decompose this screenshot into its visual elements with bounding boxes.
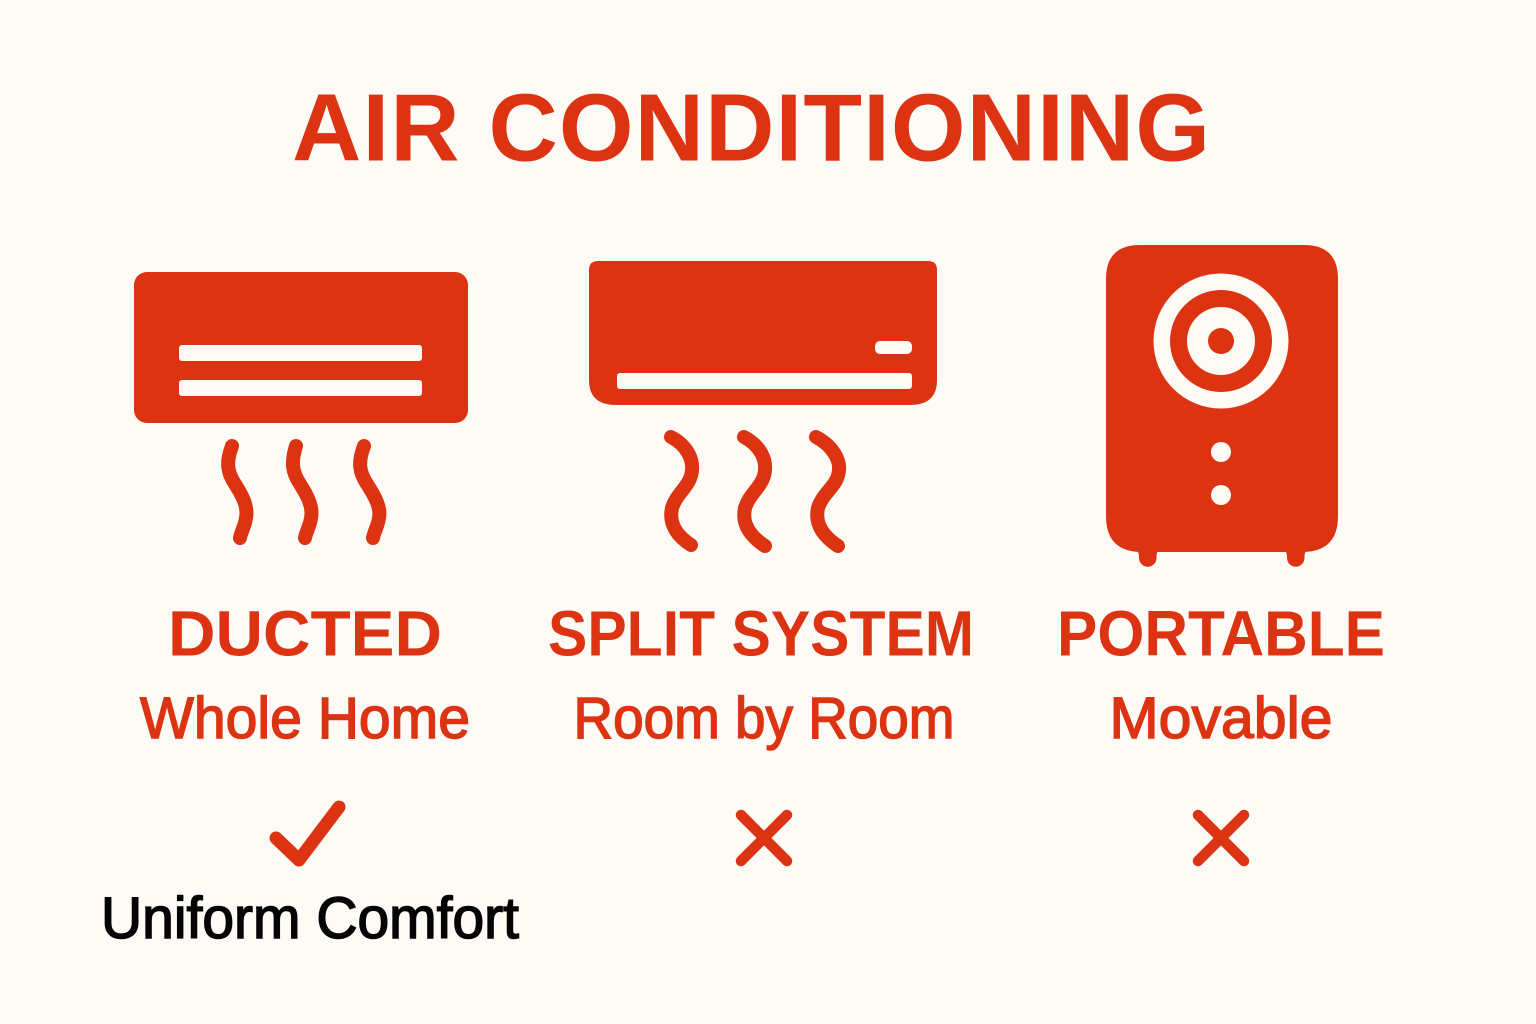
label: uniform comfort: Uniform Comfort bbox=[101, 886, 519, 951]
icon: check mark bbox=[276, 807, 339, 860]
heading: portable: PORTABLE bbox=[1057, 598, 1385, 670]
icon: cross split system bbox=[741, 815, 787, 861]
icon: portable unit bbox=[1106, 245, 1338, 567]
subheading: room by room: Room by Room bbox=[574, 686, 954, 751]
heading: split system: SPLIT SYSTEM bbox=[548, 598, 974, 670]
subheading: movable: Movable bbox=[1110, 686, 1332, 751]
icon: split system unit bbox=[589, 261, 937, 546]
icon: cross portable bbox=[1198, 815, 1244, 861]
subheading: whole home: Whole Home bbox=[140, 686, 470, 751]
title: AIR CONDITIONING bbox=[292, 74, 1210, 182]
heading: ducted: DUCTED bbox=[168, 598, 442, 670]
icon: ducted unit bbox=[134, 272, 468, 538]
